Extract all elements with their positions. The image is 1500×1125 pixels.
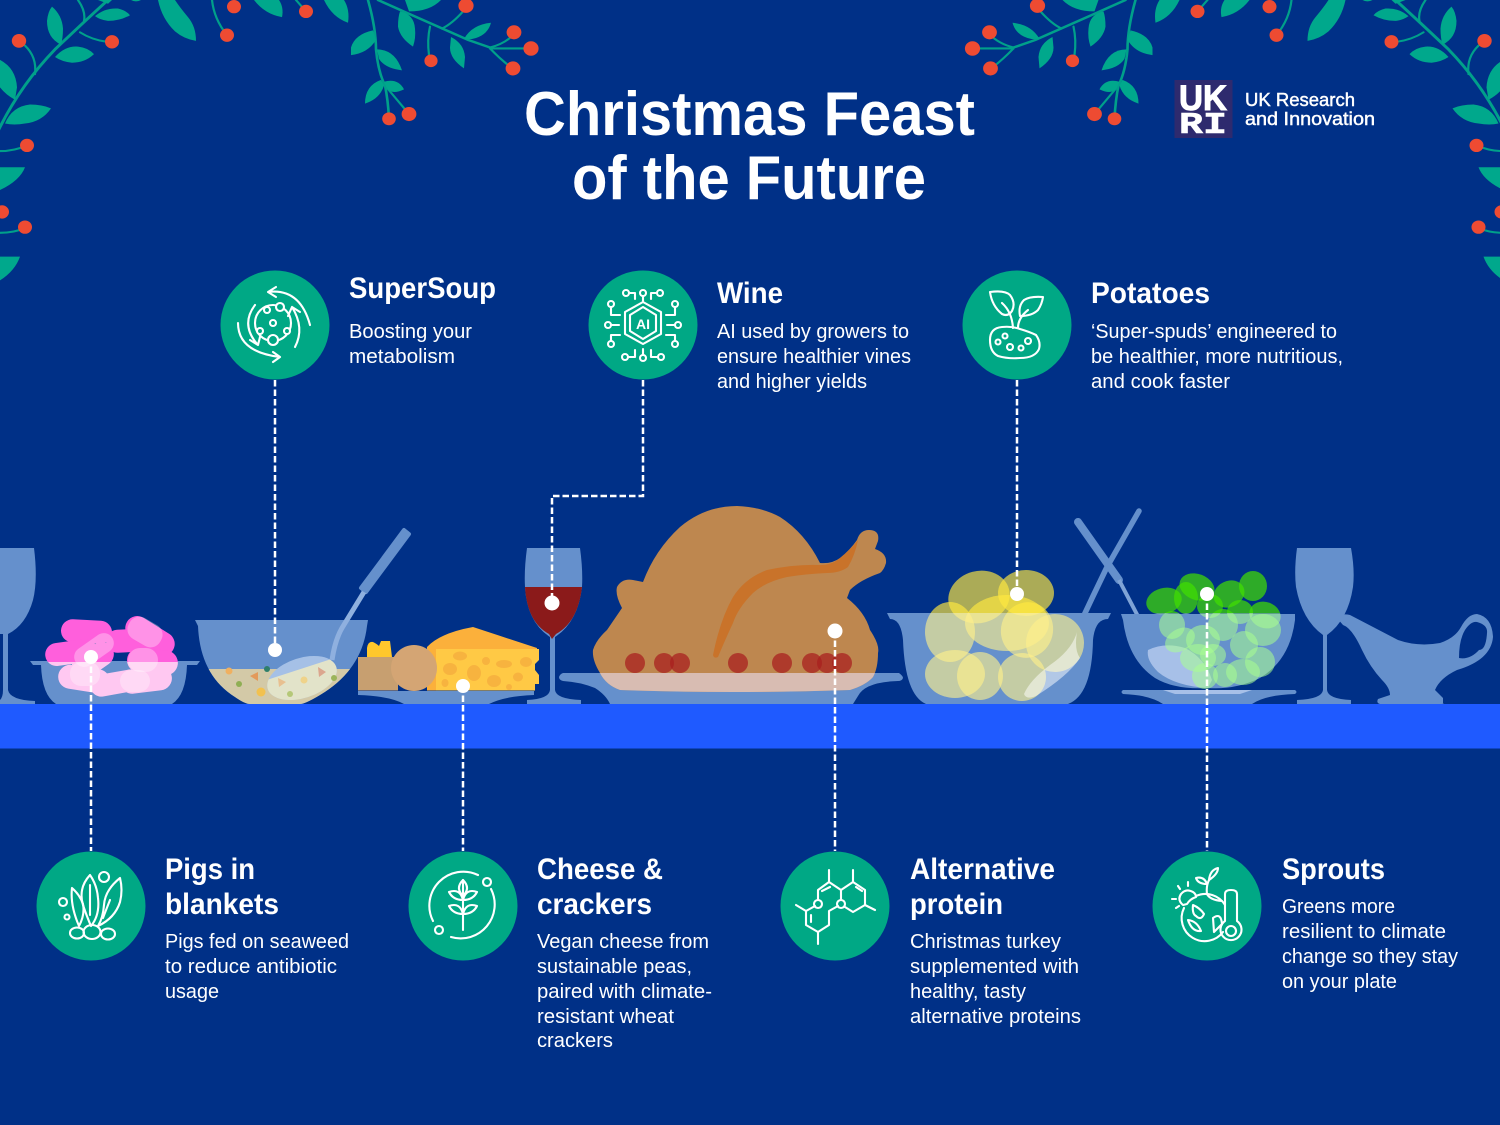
panel: Potatoes [962,270,1343,393]
logo: UKRI: and Innovation [1245,108,1375,129]
potato bowl with servers [887,511,1139,704]
panel: Wine [588,270,911,393]
text: SuperSoup description: Boosting your [349,321,472,343]
text: Cheese description: crackers [537,1030,613,1052]
text: Cheese description: paired with climate- [537,981,712,1003]
table top [0,704,1500,748]
text: Potatoes description: ‘Super-spuds’ engineered to [1091,321,1337,343]
text: Potatoes description [1091,321,1343,393]
text: Cheese description [537,931,712,1052]
connector lines [84,380,1214,851]
text: Wine description: and higher yields [717,371,867,393]
text: Wine description: ensure healthier vines [717,346,911,368]
logo: UKRI: RI [1179,108,1227,143]
panel: Cheese and crackers [408,852,712,1052]
wine glass: left edge [0,548,36,704]
text: Wine description [717,321,911,393]
icon: seaweed [59,872,122,940]
text: Pigs description: usage [165,981,219,1003]
heading: Alternative protein: Alternative [910,853,1055,886]
sprouts bowl with spoon [1078,522,1296,704]
icon: sprouting potato [990,291,1043,358]
icon: AI chip [605,290,681,361]
heading: Cheese and crackers: Cheese & [537,853,663,886]
heading: Pigs in blankets [165,853,279,921]
text: Alternative protein description [910,931,1081,1028]
text: Wine description: AI used by growers to [717,321,909,343]
heading: Wine: Wine [717,277,783,310]
text: Sprouts description: change so they stay [1282,946,1458,968]
icon: metabolism cycle [238,287,310,362]
text: Alternative protein description: alternative proteins [910,1006,1081,1028]
gravy boat [1337,614,1493,704]
text: Alternative protein description: Christmas turkey [910,931,1061,953]
cheese and crackers board [358,627,539,704]
foliage: top left garland [0,0,539,280]
text: Pigs description: Pigs fed on seaweed [165,931,349,953]
heading: Alternative protein: protein [910,888,1003,921]
roast turkey on platter [559,506,903,704]
icon: wheat [429,872,495,938]
text: Potatoes description: be healthier, more nutritious, [1091,346,1343,368]
text: SuperSoup description: metabolism [349,346,455,368]
title: Christmas Feast [524,80,975,149]
panel: Alternative protein [780,852,1081,1028]
wine glass with red wine [525,548,582,704]
text: Alternative protein description: healthy, tasty [910,981,1026,1003]
heading: Alternative protein [910,853,1055,921]
heading: SuperSoup: SuperSoup [349,272,496,305]
soup bowl with ladle [190,530,409,709]
title [524,80,975,213]
heading: Pigs in blankets: blankets [165,888,279,921]
text: Alternative protein description: supplemented with [910,956,1079,978]
heading: Pigs in blankets: Pigs in [165,853,255,886]
text: Sprouts description: resilient to climate [1282,921,1446,943]
foliage: top right garland [965,0,1500,280]
icon: molecule [796,870,875,944]
panel: Pigs in blankets [36,852,349,1003]
logo: UKRI: UK [1179,79,1227,118]
icon: climate earth and thermometer [1172,868,1242,941]
text: Pigs description [165,931,349,1003]
text: Sprouts description [1282,896,1458,993]
title: of the Future [572,144,926,213]
heading: Cheese and crackers [537,853,663,921]
text: SuperSoup description [349,321,472,368]
wine glass: right [1295,548,1354,704]
icon text: AI: AI [636,316,650,332]
pigs in blankets bowl [30,612,200,704]
text: Sprouts description: on your plate [1282,971,1397,993]
text: Cheese description: Vegan cheese from [537,931,709,953]
logo: UKRI [1174,79,1375,143]
text: Cheese description: sustainable peas, [537,956,692,978]
panel: Sprouts [1152,852,1458,993]
logo: UKRI: UK Research [1245,89,1355,110]
heading: Potatoes: Potatoes [1091,277,1210,310]
heading: Cheese and crackers: crackers [537,888,652,921]
text: Sprouts description: Greens more [1282,896,1395,918]
heading: Sprouts: Sprouts [1282,853,1385,886]
text: Potatoes description: and cook faster [1091,371,1230,393]
text: Cheese description: resistant wheat [537,1006,674,1028]
text: Pigs description: to reduce antibiotic [165,956,337,978]
panel: SuperSoup [220,270,496,380]
